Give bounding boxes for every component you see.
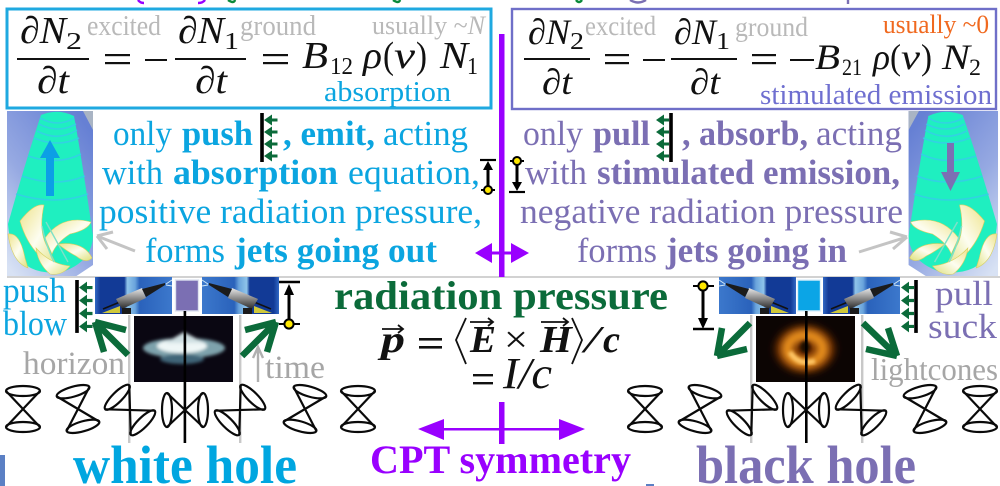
image: white hole <box>134 316 233 382</box>
formula: radiation pressure: I/c <box>502 349 552 398</box>
equation: stimulated emission: N <box>941 37 972 77</box>
arrow: time <box>253 347 263 382</box>
text: black hole description: acting <box>816 114 902 153</box>
icon: down marker <box>509 157 525 192</box>
label: time: time <box>265 350 325 386</box>
image: black hole <box>756 316 855 382</box>
label: absorption: absorption <box>324 76 452 108</box>
arrow: green right inward <box>863 323 897 356</box>
formula: radiation pressure <box>377 318 620 398</box>
equation: stimulated emission: ) <box>921 37 932 77</box>
text: white hole description: positive radiation pressure, <box>99 192 482 231</box>
text: white hole description: forms <box>145 231 225 270</box>
label: pull suck: suck <box>928 307 998 346</box>
text: black hole description <box>520 114 903 270</box>
text: white hole description: acting <box>383 114 468 153</box>
formula: radiation pressure: H <box>539 319 574 361</box>
equation: stimulated emission: ∂N <box>528 12 572 52</box>
shape: blue square <box>798 280 820 311</box>
text: white hole description: jets going out <box>234 231 437 270</box>
label: usually N: usually ~N <box>372 11 487 40</box>
label: pull suck: pull <box>935 274 993 313</box>
divider: gray rule <box>7 276 1000 278</box>
equation: stimulated emission: 2 <box>570 29 584 55</box>
equation: absorption: ν <box>394 35 415 77</box>
image: laser left <box>95 277 172 314</box>
arrow: CPT symmetry <box>418 402 585 444</box>
equation: absorption: N <box>439 35 471 77</box>
image: laser right <box>202 277 279 314</box>
text: white hole description: only <box>113 114 172 153</box>
equation: stimulated emission: 2 <box>969 55 981 80</box>
text: black hole description: negative radiation pressure <box>520 192 903 231</box>
icon: push plate <box>75 280 92 333</box>
shape: purple square <box>176 280 198 311</box>
formula: radiation pressure: c <box>603 319 620 361</box>
equation: absorption: ∂t <box>37 60 71 102</box>
equation: absorption: ( <box>383 35 394 77</box>
label: pull suck <box>928 274 998 346</box>
equation: stimulated emission <box>524 12 981 102</box>
icon: push plate in text <box>260 113 278 162</box>
text: black hole description: stimulated emission, <box>597 153 900 192</box>
equation: stimulated emission: ( <box>890 37 901 77</box>
equation: absorption: B <box>302 35 328 77</box>
light cones: black hole side <box>628 382 997 438</box>
label: horizon: horizon <box>23 346 125 382</box>
text: black hole description: with <box>525 153 587 192</box>
equation: stimulated emission: ∂N <box>674 12 718 52</box>
text: white hole description <box>99 114 482 270</box>
equation: absorption: 1 <box>224 29 239 55</box>
arrow: central purple axis <box>475 34 529 277</box>
label: excited: excited <box>585 11 656 41</box>
text: white hole description: , emit, <box>283 114 375 153</box>
label: usually 0: usually ~0 <box>883 10 989 39</box>
icon: black hole jet <box>909 111 998 277</box>
label: push blow <box>3 271 68 343</box>
label: push blow: push <box>3 271 66 310</box>
formula: radiation pressure: E <box>469 319 496 361</box>
equation: stimulated emission: 1 <box>716 29 730 55</box>
formula: radiation pressure: × <box>504 319 528 361</box>
text: black hole description: forms <box>577 231 657 270</box>
text: white hole description: equation, <box>348 153 480 192</box>
panel: absorption equation <box>7 9 491 108</box>
icon: white hole jet <box>7 111 93 277</box>
equation: absorption <box>17 10 478 102</box>
equation: stimulated emission: ν <box>901 37 920 77</box>
text: white hole description: with <box>102 153 163 192</box>
text: white hole description: push <box>182 114 253 153</box>
icon: pull plate in text <box>656 113 673 162</box>
formula: radiation pressure: / <box>581 319 605 361</box>
equation: absorption: 1 <box>467 54 478 80</box>
lines: horizon and axis <box>128 311 241 443</box>
equation: absorption: ∂N <box>20 10 69 52</box>
arrow: green left inward <box>717 323 750 356</box>
icon: pull plate <box>901 280 918 333</box>
text: white hole description: absorption <box>173 153 338 192</box>
label: ground: ground <box>240 11 316 42</box>
image: laser right <box>823 277 900 314</box>
heading: CPT symmetry: CPT symmetry <box>370 437 631 482</box>
arrow: gray pointer to left jet <box>97 232 135 251</box>
text: black hole description: only <box>523 114 583 153</box>
text: black hole description: , absorb, <box>682 114 808 153</box>
equation: stimulated emission: ρ <box>872 37 890 77</box>
cropped heading fragments at top edge <box>138 0 848 4</box>
formula: radiation pressure: p <box>377 319 405 361</box>
label: excited: excited <box>87 11 161 42</box>
equation: absorption: 12 <box>330 54 353 80</box>
equation: stimulated emission: ∂t <box>542 62 573 102</box>
equation: absorption: ∂t <box>195 60 229 102</box>
arrow: gray pointer to right jet <box>859 232 907 252</box>
arrow: green right outward <box>242 322 276 356</box>
heading: radiation pressure: radiation pressure <box>334 273 668 318</box>
arrow: green left outward <box>95 322 128 355</box>
panel: white hole lower diagram <box>3 271 325 443</box>
edge fragments <box>0 455 654 486</box>
icon: up marker <box>480 160 496 194</box>
label: lightcones: lightcones <box>871 351 998 387</box>
panel: stimulated emission equation <box>512 9 996 111</box>
equation: absorption: 2 <box>66 29 82 55</box>
label: push blow: blow <box>3 304 68 343</box>
text: black hole description: jets going in <box>665 231 847 270</box>
equation: stimulated emission: ∂t <box>690 62 721 102</box>
label: ground: ground <box>735 12 808 42</box>
equation: absorption: ρ <box>362 35 382 77</box>
lines: horizon and axis <box>750 311 863 443</box>
text: black hole description: pull <box>593 114 650 153</box>
equation: absorption: ) <box>416 35 427 77</box>
light cones: white hole side <box>6 382 375 438</box>
equation: stimulated emission: B <box>815 37 840 77</box>
equation: absorption: ∂N <box>178 10 227 52</box>
equation: stimulated emission: 21 <box>842 55 862 80</box>
label: stimulated emission: stimulated emission <box>760 79 992 111</box>
panel: black hole lower diagram <box>693 274 998 443</box>
icon: time marker <box>279 282 300 329</box>
image: laser left <box>719 277 796 314</box>
icon: time marker <box>693 281 714 329</box>
